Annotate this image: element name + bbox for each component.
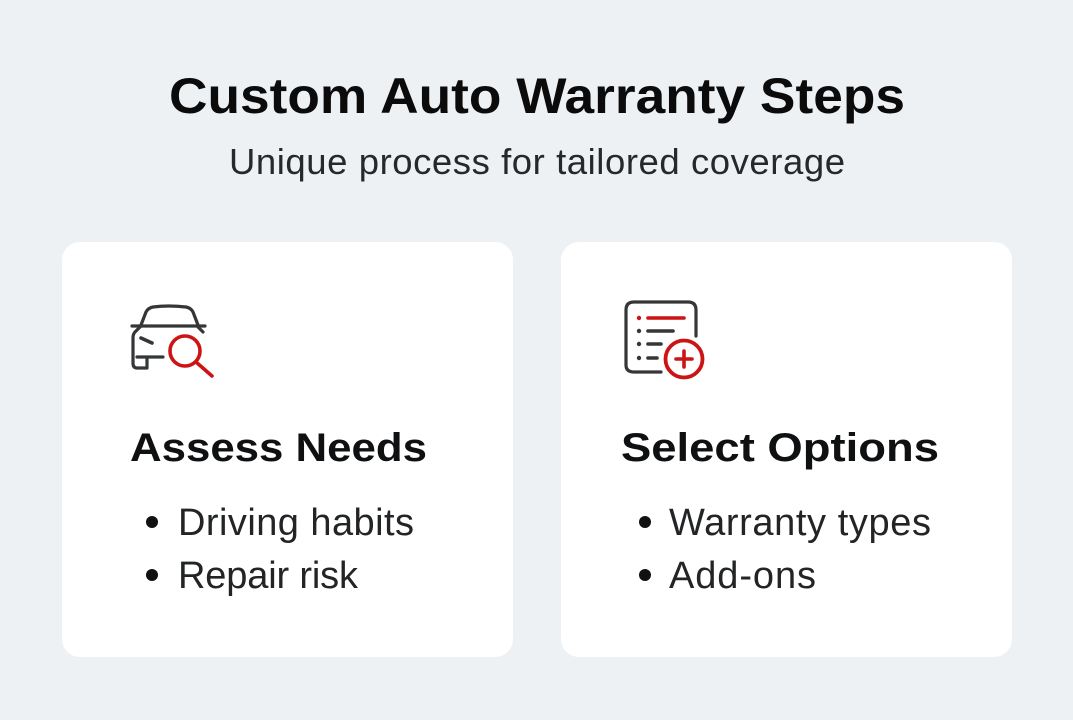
bullet list: Warranty types — [669, 502, 931, 544]
heading: select options: Select Options — [621, 426, 939, 470]
subtitle: Unique process for tailored coverage — [229, 141, 845, 182]
bullet list: Repair risk — [178, 555, 359, 597]
bullet list: Add-ons — [669, 555, 816, 597]
bullet list — [639, 502, 931, 597]
panel: assess needs — [62, 242, 513, 657]
panel background — [62, 242, 513, 657]
bullet list: Driving habits — [178, 502, 414, 544]
icon: car with magnifier — [132, 306, 212, 376]
icon: checklist with plus — [626, 302, 702, 378]
heading: assess needs: Assess Needs — [130, 426, 427, 470]
title: Custom Auto Warranty Steps — [169, 68, 905, 124]
bullet list — [146, 502, 414, 597]
panel background — [561, 242, 1012, 657]
panel: select options — [561, 242, 1012, 657]
